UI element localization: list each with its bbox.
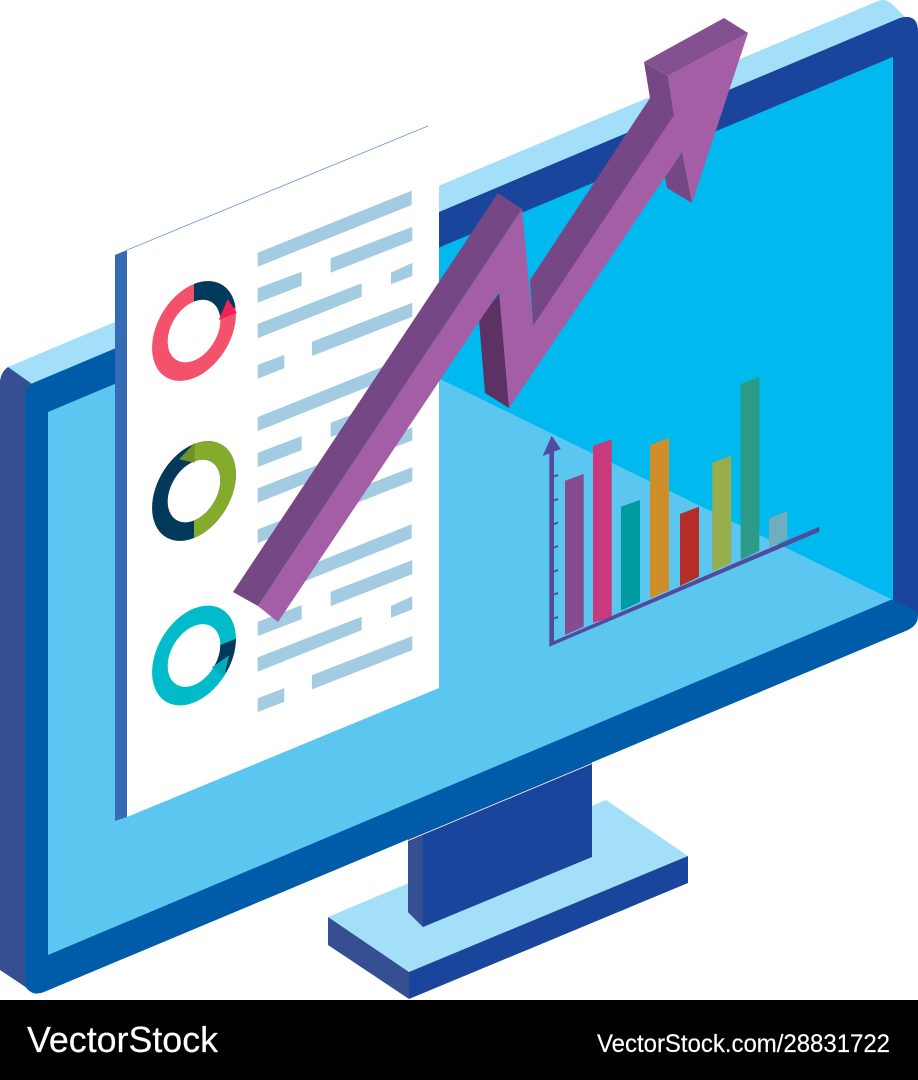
bars [565, 377, 787, 635]
text lines block 1 [258, 191, 412, 379]
arrow side lower section [233, 193, 522, 606]
rising zig-zag arrow [233, 18, 748, 622]
image url: VectorStock.com/28831722 [597, 1030, 890, 1058]
stand neck [408, 755, 592, 927]
arrow side upper section [530, 62, 674, 326]
arrow front face [258, 33, 748, 622]
arrow head top [644, 18, 748, 76]
text lines block 2 [258, 355, 412, 543]
arrow notch underside [479, 292, 509, 408]
monitor top edge [8, 0, 906, 385]
brand name: VectorStock [27, 1019, 219, 1060]
arrow head underside [665, 152, 692, 203]
text lines block 3 [258, 524, 412, 712]
chart axes [543, 436, 819, 647]
page top edge [127, 126, 428, 250]
stand base [328, 800, 688, 999]
page spine [115, 250, 127, 821]
monitor screen [48, 57, 893, 955]
donut chart: teal [152, 592, 236, 719]
document page [115, 115, 439, 821]
monitor left side [0, 367, 32, 990]
bar chart [543, 377, 819, 647]
monitor stand [328, 755, 688, 999]
donut chart: green [152, 427, 236, 555]
watermark footer bar [0, 1000, 918, 1080]
page sheet [127, 122, 439, 817]
donut chart: pink [152, 267, 237, 395]
